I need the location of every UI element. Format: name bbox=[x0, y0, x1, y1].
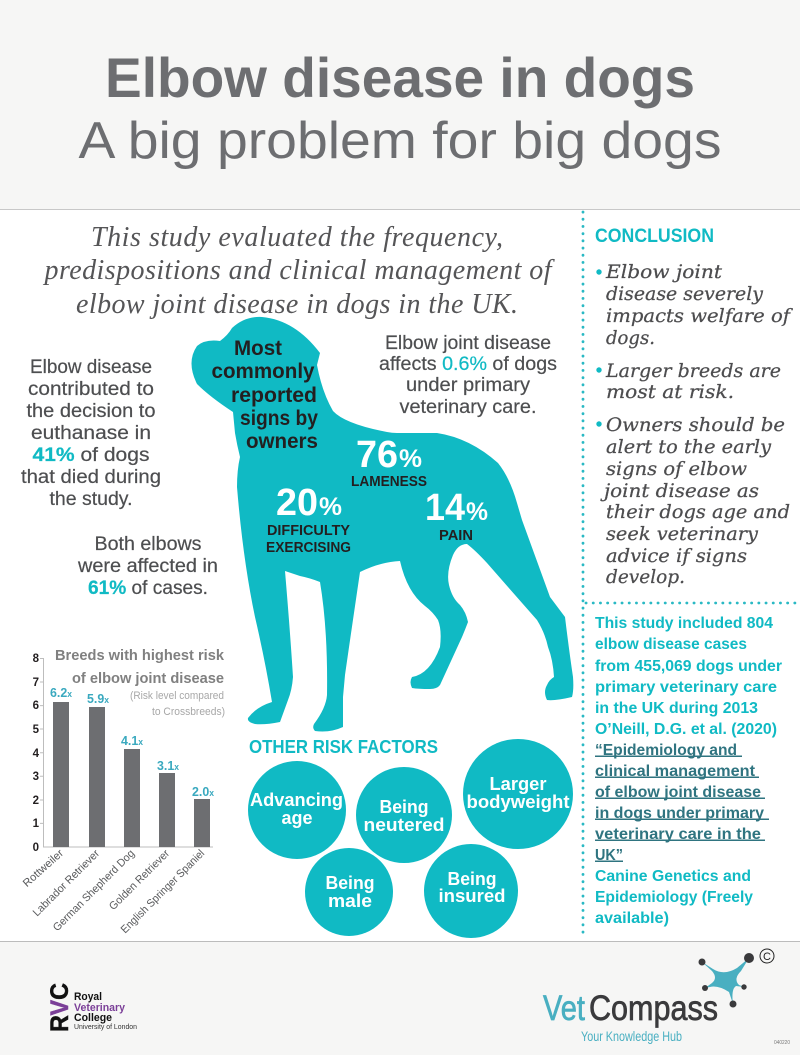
risk factors heading: OTHER RISK FACTORS bbox=[249, 737, 438, 757]
right stat: prevalence: veterinary care. bbox=[400, 397, 536, 418]
left stat: both elbows bbox=[77, 534, 218, 599]
study summary: in the UK during 2013 bbox=[595, 700, 758, 717]
conclusion bullets: impacts welfare of bbox=[606, 305, 793, 327]
logo star mark bbox=[698, 953, 754, 1008]
stat: difficulty exercising 20%: DIFFICULTY bbox=[267, 523, 350, 539]
title: Elbow disease in dogs bbox=[105, 46, 695, 109]
bars bbox=[53, 702, 210, 847]
logo: VetCompass bbox=[543, 949, 774, 1044]
bar values: 4.1x bbox=[121, 733, 143, 748]
left stat: euthanasia: that died during bbox=[21, 467, 161, 488]
logo: RVC: Veterinary bbox=[74, 1002, 126, 1014]
axis labels: 4 bbox=[33, 748, 40, 760]
circle: advancing age: age bbox=[282, 808, 312, 828]
breed labels: English Springer Spaniel bbox=[119, 848, 207, 936]
breed labels: Rottweiler bbox=[21, 847, 66, 890]
bar values bbox=[50, 685, 214, 799]
chart title bbox=[55, 647, 225, 718]
paper title link: clinical management bbox=[595, 763, 755, 780]
left stat: euthanasia: contributed to bbox=[28, 379, 154, 400]
axis labels: 1 bbox=[33, 818, 40, 830]
breed labels: Golden Retriever bbox=[107, 847, 172, 913]
circle: larger bodyweight bbox=[463, 739, 573, 849]
circle: advancing age bbox=[248, 761, 346, 859]
right stat: prevalence: Elbow joint disease bbox=[385, 333, 551, 354]
bar values: 2.0x bbox=[192, 784, 214, 799]
circle: being insured: insured bbox=[438, 886, 506, 906]
conclusion bullets: Elbow joint bbox=[605, 261, 722, 283]
conclusion bullets: disease severely bbox=[606, 283, 763, 305]
left stat: euthanasia: Elbow disease bbox=[30, 357, 152, 378]
stat: lameness 76%: LAMENESS bbox=[351, 474, 427, 490]
stat: lameness 76%: % bbox=[399, 445, 422, 473]
logo: VetCompass: Vet bbox=[543, 989, 585, 1028]
circle: being neutered: neutered bbox=[364, 815, 444, 835]
circle: being neutered: Being bbox=[380, 797, 428, 817]
copyright mark bbox=[760, 949, 774, 963]
stat: lameness 76% bbox=[351, 434, 427, 490]
axis labels: 2 bbox=[33, 795, 39, 807]
dog heading: most commonly reported signs: reported bbox=[231, 384, 317, 407]
study summary bbox=[595, 615, 782, 738]
axis labels bbox=[33, 653, 40, 854]
study summary: O’Neill, D.G. et al. (2020) bbox=[595, 721, 777, 738]
logo: RVC: RVC bbox=[46, 983, 74, 1032]
conclusion bullets: signs of elbow bbox=[606, 458, 747, 480]
breed labels: German Shepherd Dog bbox=[51, 848, 137, 934]
circle: being insured: Being bbox=[448, 869, 496, 889]
paper title link: in dogs under primary bbox=[595, 805, 764, 822]
conclusion bullets: seek veterinary bbox=[606, 523, 758, 545]
stat: lameness 76%: 76 bbox=[356, 434, 398, 476]
circle: advancing age: Advancing bbox=[250, 790, 343, 810]
conclusion bullets: their dogs age and bbox=[606, 501, 790, 523]
left stat: euthanasia: 41% of dogs bbox=[32, 445, 150, 466]
stat: pain 14%: 14 bbox=[425, 487, 465, 529]
other risk factors bbox=[248, 737, 573, 938]
paper title link: veterinary care in the bbox=[595, 826, 761, 843]
journal: Epidemiology (Freely bbox=[595, 889, 753, 906]
intro text: predispositions and clinical management of bbox=[42, 255, 555, 286]
chart title: (Risk level compared bbox=[130, 690, 224, 702]
conclusion bullets: advice if signs bbox=[606, 545, 747, 567]
left stat: both elbows: 61% of cases. bbox=[88, 578, 208, 599]
intro text bbox=[42, 222, 555, 320]
stat: pain 14%: % bbox=[466, 498, 488, 526]
stat: difficulty exercising 20%: 20 bbox=[276, 482, 318, 524]
axis labels: 5 bbox=[33, 724, 40, 736]
stat: difficulty exercising 20%: % bbox=[319, 493, 342, 521]
dog heading: most commonly reported signs: signs by bbox=[240, 407, 318, 430]
intro text: elbow joint disease in dogs in the UK. bbox=[76, 289, 518, 320]
journal: Canine Genetics and bbox=[595, 868, 751, 885]
left stat: both elbows: Both elbows bbox=[94, 534, 202, 555]
stat: pain 14%: PAIN bbox=[439, 528, 473, 544]
left stat: euthanasia: the study. bbox=[50, 489, 132, 510]
paper title link bbox=[595, 742, 769, 864]
paper title link: of elbow joint disease bbox=[595, 784, 761, 801]
paper title link: UK” bbox=[595, 847, 623, 864]
axis labels: 3 bbox=[33, 771, 39, 783]
circle: being insured bbox=[424, 844, 518, 938]
right stat: prevalence: affects 0.6% of dogs bbox=[379, 354, 557, 375]
circle: being male: male bbox=[328, 891, 372, 911]
dog silhouette bbox=[192, 317, 573, 732]
stat: difficulty exercising 20% bbox=[266, 482, 351, 556]
dog heading: most commonly reported signs: commonly bbox=[212, 360, 315, 383]
header band bbox=[0, 0, 800, 210]
study summary: primary veterinary care bbox=[595, 679, 777, 696]
stat: pain 14% bbox=[425, 487, 488, 544]
chart title: of elbow joint disease bbox=[72, 670, 224, 687]
logo: VetCompass: Your Knowledge Hub bbox=[581, 1028, 682, 1044]
axis labels: 6 bbox=[33, 700, 39, 712]
circle: being neutered bbox=[356, 767, 452, 863]
dog heading: most commonly reported signs: Most bbox=[234, 337, 282, 360]
title: A big problem for big dogs bbox=[78, 112, 722, 170]
paper title link: “Epidemiology and bbox=[595, 742, 737, 759]
axis labels: 8 bbox=[33, 653, 40, 665]
left stat: both elbows: were affected in bbox=[77, 556, 218, 577]
conclusion bullets: Larger breeds are bbox=[605, 360, 781, 382]
axis bbox=[40, 658, 213, 847]
chart title: Breeds with highest risk bbox=[55, 647, 225, 664]
axis labels: 0 bbox=[33, 842, 39, 854]
circle: larger bodyweight: Larger bbox=[490, 774, 546, 794]
study details bbox=[595, 615, 782, 927]
breed labels: Labrador Retriever bbox=[31, 847, 102, 919]
conclusion heading: CONCLUSION bbox=[595, 226, 714, 247]
bar values: 5.9x bbox=[87, 691, 109, 706]
logo: RVC: College bbox=[74, 1012, 112, 1024]
left stat: euthanasia: the decision to bbox=[26, 401, 156, 422]
left stat: euthanasia bbox=[21, 357, 161, 510]
conclusion bullets: most at risk. bbox=[606, 381, 734, 403]
title bbox=[78, 46, 722, 170]
conclusion bullets: dogs. bbox=[606, 327, 655, 349]
right stat: prevalence: under primary bbox=[406, 375, 531, 396]
footer band bbox=[0, 941, 800, 1055]
logo: RVC: Royal bbox=[74, 991, 102, 1003]
right stat: prevalence bbox=[379, 333, 557, 418]
bar values: 3.1x bbox=[157, 758, 179, 773]
circle: being male: Being bbox=[326, 873, 374, 893]
axis labels: 7 bbox=[33, 677, 39, 689]
copyright mark: C bbox=[763, 951, 771, 963]
circle: being male bbox=[305, 848, 393, 936]
logo: RVC: University of London bbox=[74, 1024, 137, 1031]
intro text: This study evaluated the frequency, bbox=[91, 222, 503, 253]
conclusion bullets: develop. bbox=[606, 566, 685, 588]
chart title: to Crossbreeds) bbox=[152, 706, 225, 718]
breed labels bbox=[21, 847, 207, 936]
logo: VetCompass: Compass bbox=[589, 989, 718, 1028]
conclusion bullets bbox=[596, 261, 793, 588]
version code: 040220 bbox=[774, 1040, 790, 1046]
conclusion panel bbox=[595, 226, 793, 588]
journal: available) bbox=[595, 910, 669, 927]
logo: RVC bbox=[46, 983, 137, 1032]
stat: difficulty exercising 20%: EXERCISING bbox=[266, 540, 351, 556]
conclusion bullets: joint disease as bbox=[600, 480, 759, 502]
journal bbox=[595, 868, 753, 927]
circle: larger bodyweight: bodyweight bbox=[466, 792, 570, 812]
bar values: 6.2x bbox=[50, 685, 72, 700]
left stat: euthanasia: euthanase in bbox=[31, 423, 151, 444]
conclusion bullets: Owners should be bbox=[606, 414, 785, 436]
dog heading: most commonly reported signs bbox=[212, 337, 318, 453]
conclusion bullets: alert to the early bbox=[606, 436, 771, 458]
dog heading: most commonly reported signs: owners bbox=[246, 430, 318, 453]
study summary: elbow disease cases bbox=[595, 636, 747, 653]
study summary: This study included 804 bbox=[595, 615, 773, 632]
bar chart: breeds with highest risk bbox=[21, 647, 225, 936]
study summary: from 455,069 dogs under bbox=[595, 658, 782, 675]
